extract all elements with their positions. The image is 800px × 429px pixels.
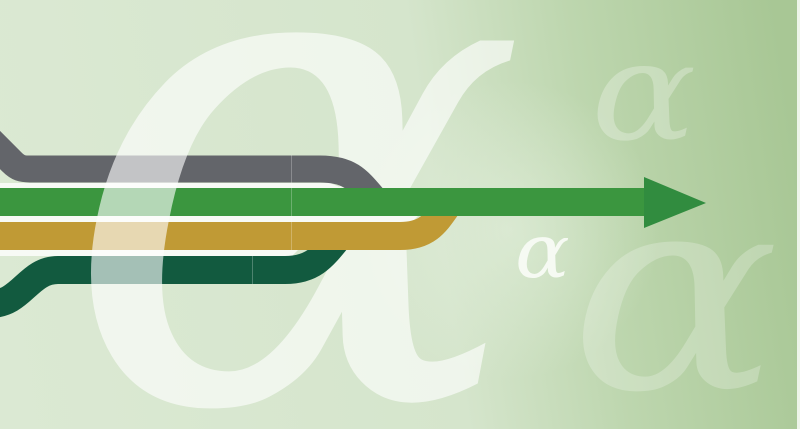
arrow head <box>644 177 706 228</box>
lines passing over the alpha <box>240 155 644 284</box>
small white alpha: α <box>515 209 570 295</box>
small alpha top right: α <box>591 12 696 172</box>
lines behind the alpha stroke <box>0 131 240 318</box>
